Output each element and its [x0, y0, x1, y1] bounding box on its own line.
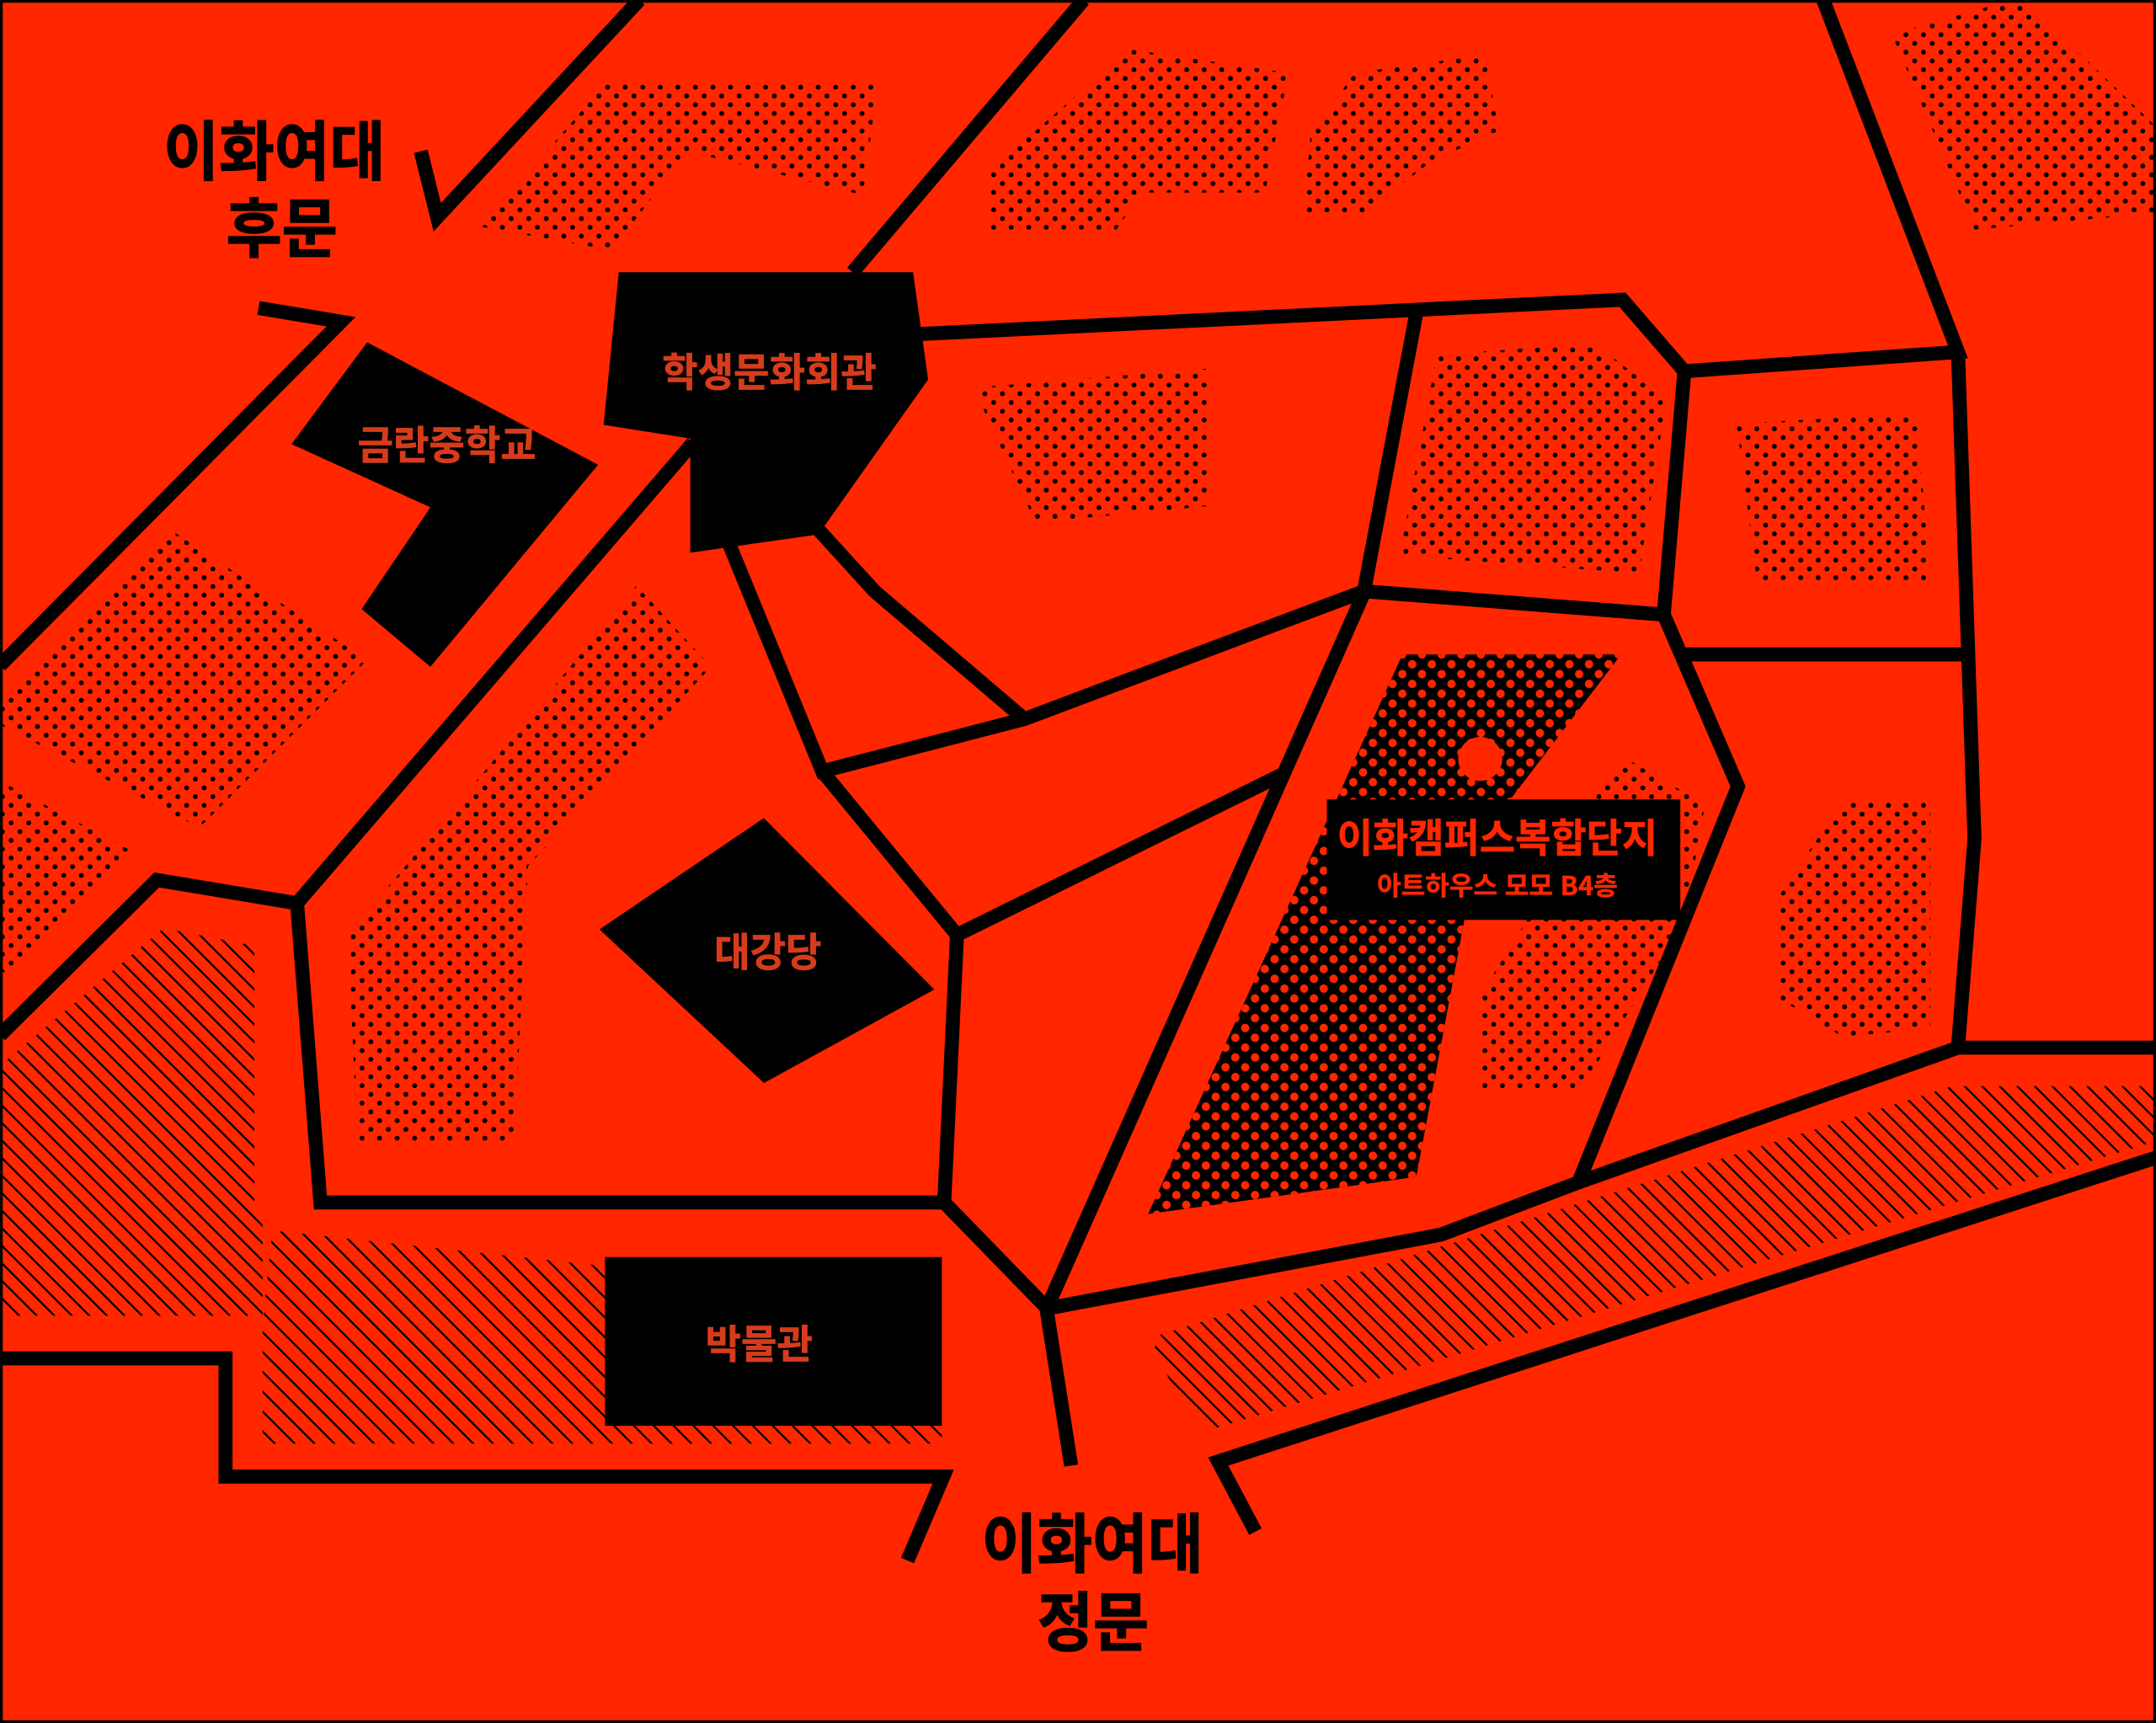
building: 대강당: 대강당: [714, 920, 822, 979]
destination label: [1327, 799, 1680, 920]
label: 이화여대 정문: [982, 1493, 1203, 1665]
label: 이화여대 후문: [163, 100, 385, 271]
label: 이화여대 후문: 후문: [227, 178, 338, 271]
location marker: [1458, 737, 1502, 781]
building: 대강당: [600, 818, 934, 1083]
building: 학생문화회관: [604, 272, 928, 552]
label: 이화여대 정문: 정문: [1038, 1571, 1149, 1665]
building: 박물관: 박물관: [706, 1312, 813, 1370]
building: 학생문화회관: 학생문화회관: [662, 340, 877, 398]
building: 박물관: [605, 1257, 942, 1426]
building: 금란중학교: 금란중학교: [358, 413, 536, 471]
destination label: 이화캠퍼스복합단지: [1337, 806, 1657, 864]
label: 이화여대 정문: 이화여대: [982, 1493, 1203, 1587]
building: 금란중학교: [291, 343, 598, 667]
hatched areas: [0, 928, 2156, 1443]
dotted areas: [0, 0, 2156, 1144]
label: 이화여대 후문: 이화여대: [163, 100, 385, 194]
destination label: 아트하우스 모모 B4층: [1377, 865, 1618, 903]
destination: 이화캠퍼스복합단지: [1148, 654, 1680, 1214]
